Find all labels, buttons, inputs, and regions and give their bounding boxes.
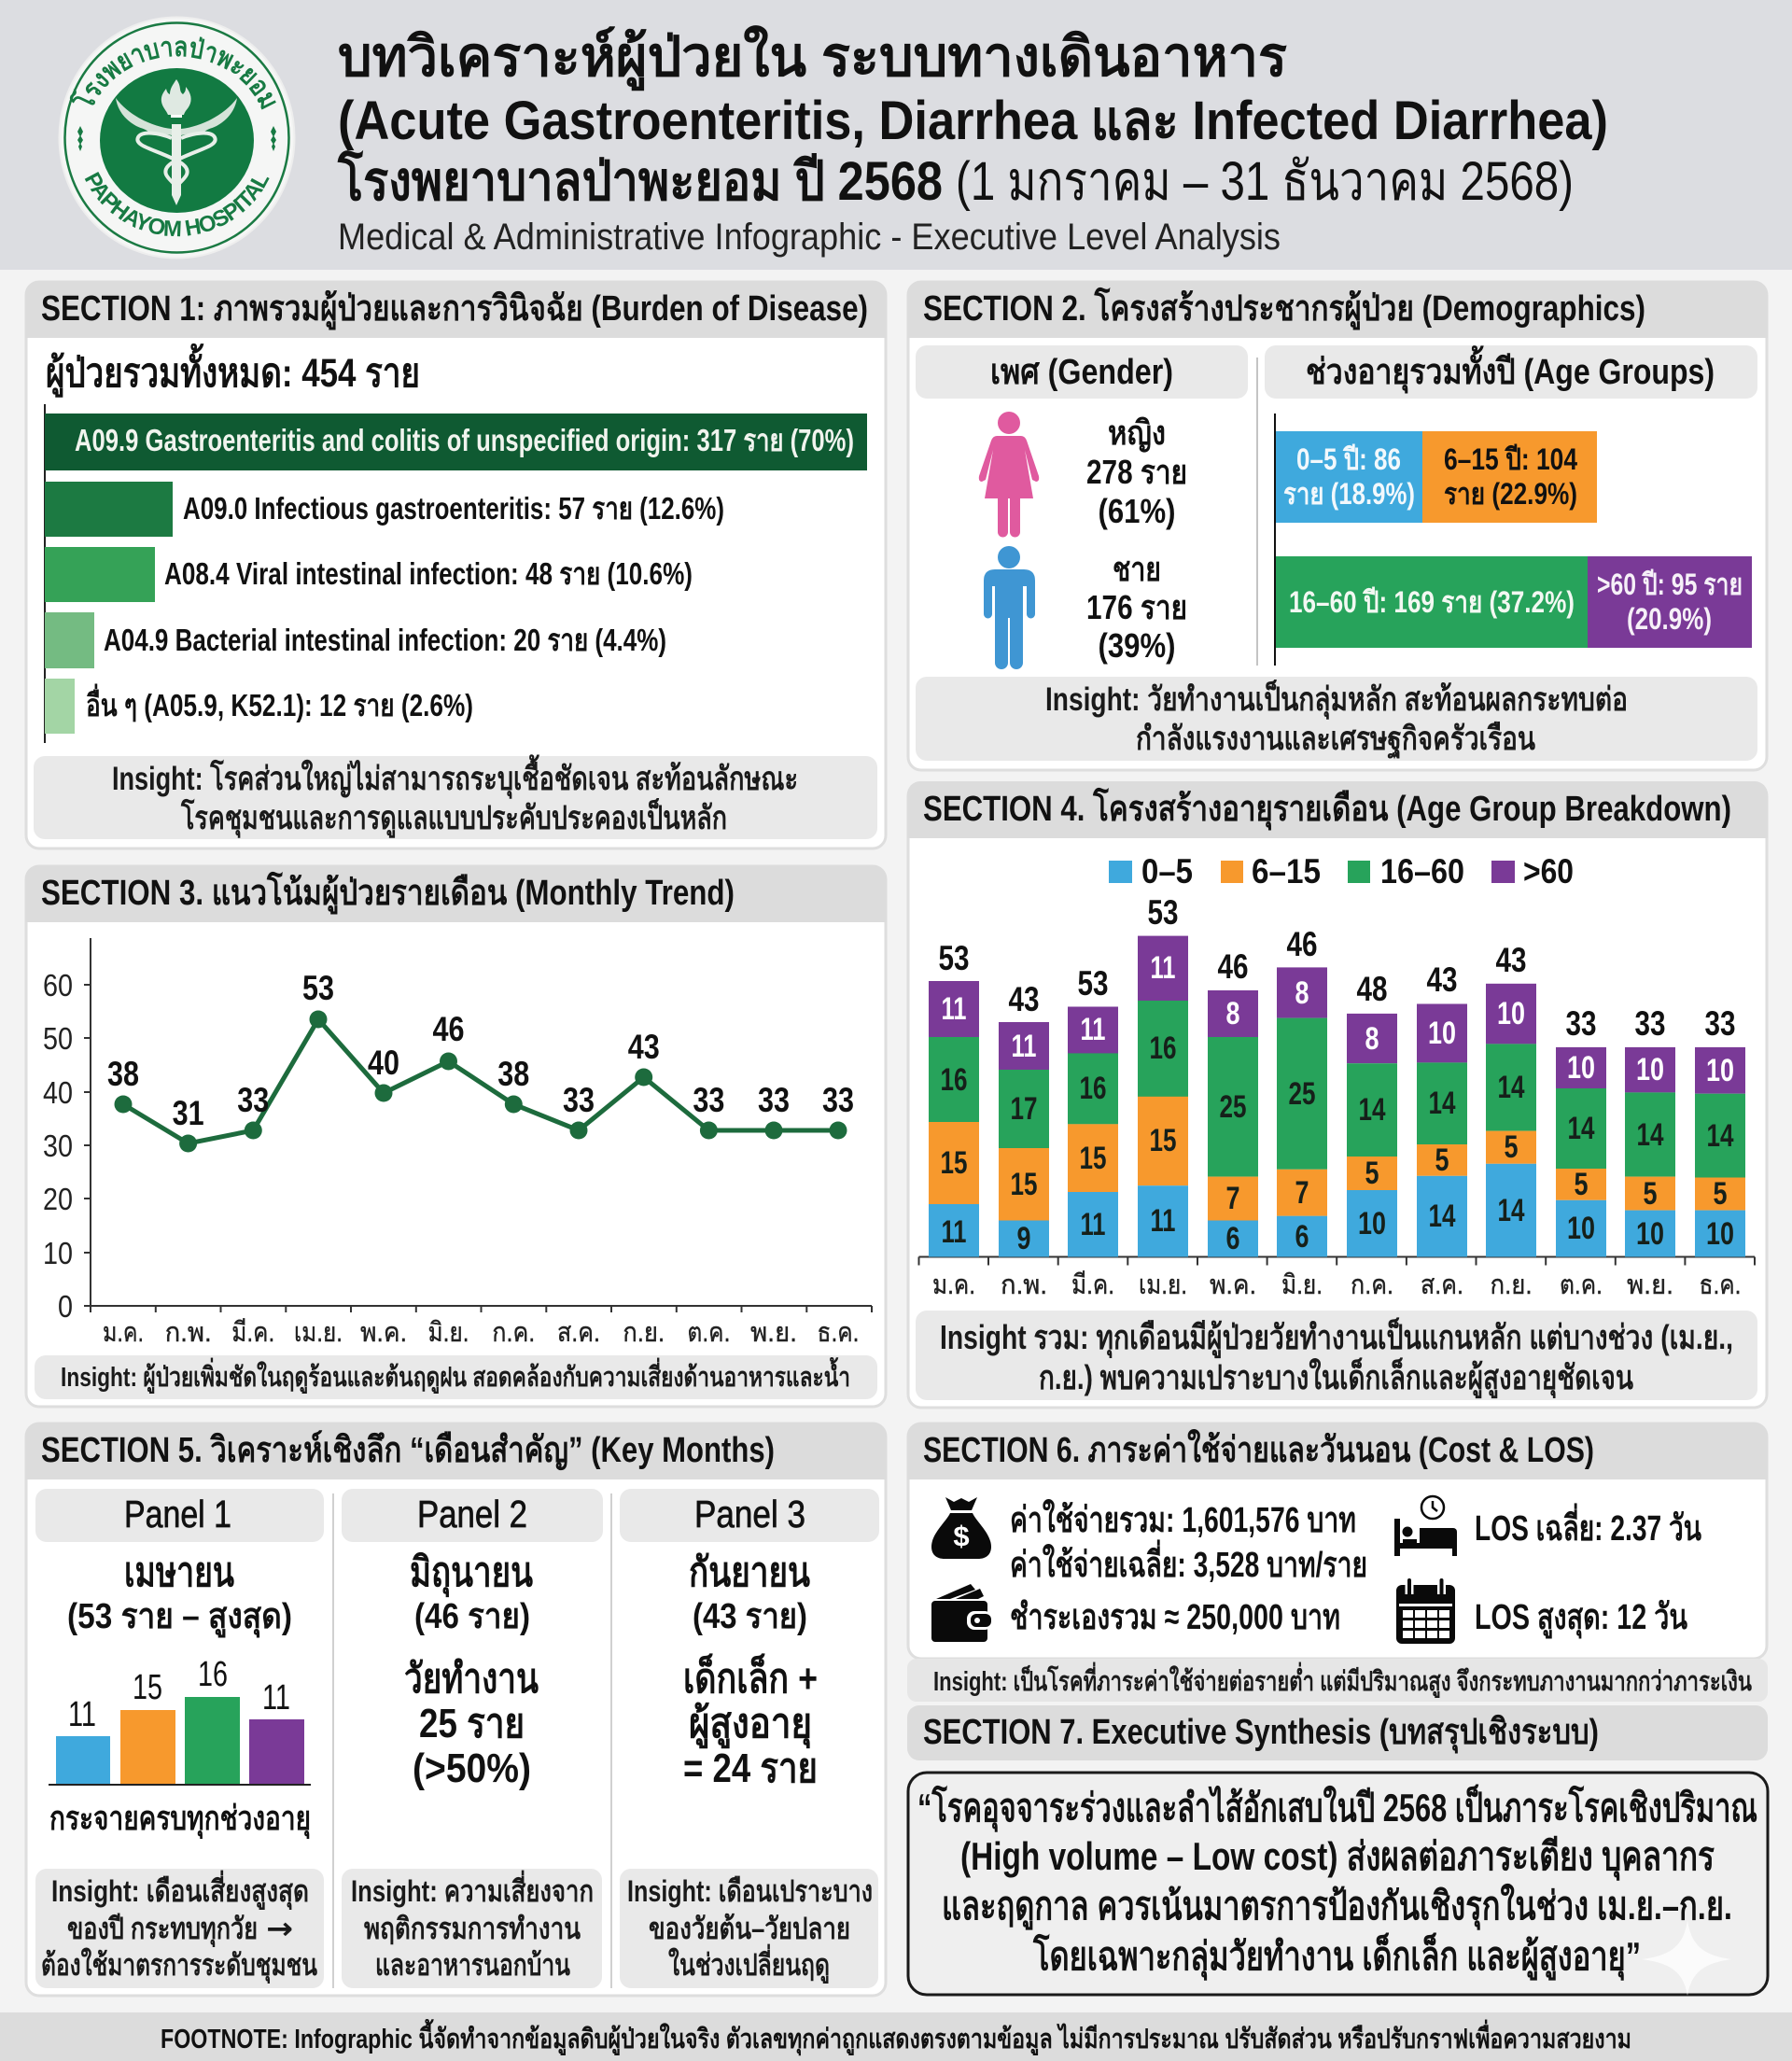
insight panel 2: Insight: ความเสี่ยงจาก <box>351 1870 594 1908</box>
month labels: ก.พ. <box>1001 1270 1047 1300</box>
month labels: ก.ย. <box>1490 1270 1533 1300</box>
bar: Feb: 9 <box>1017 1221 1030 1256</box>
month labels: เม.ย. <box>294 1318 343 1348</box>
mini bar chart: 15 <box>133 1668 162 1707</box>
panel 3: September: Panel 3 <box>694 1493 805 1535</box>
insight panel 3: ของวัยต้น–วัยปลาย <box>649 1912 850 1945</box>
line chart <box>43 938 872 1348</box>
bar: Apr <box>1138 893 1188 1256</box>
insight box section 4 <box>916 1311 1757 1400</box>
insight box section 2: กำลังแรงงานและเศรษฐกิจครัวเรือน <box>1136 721 1535 760</box>
bar: Mar: 11 <box>1081 1012 1105 1047</box>
panel: section 7 heading bar: SECTION 7. Executive Synthesis (บทสรุปเชิงระบบ) <box>923 1713 1599 1754</box>
bar: Nov: 5 <box>1643 1176 1658 1212</box>
bar: Dec: 10 <box>1706 1216 1734 1252</box>
bar: Jul: 5 <box>1365 1156 1379 1191</box>
month labels: ม.ค. <box>932 1270 975 1300</box>
bar: May: 25 <box>1219 1089 1247 1125</box>
bar: Aug: 14 <box>1428 1199 1456 1234</box>
age bar 6-15: ราย (22.9%) <box>1444 477 1577 511</box>
trend line <box>123 1019 838 1143</box>
LOS max: LOS สูงสุด: 12 วัน <box>1475 1598 1687 1639</box>
age groups sub-header: ช่วงอายุรวมทั้งปี (Age Groups) <box>1306 345 1715 394</box>
panel: section 5 key months <box>25 1423 887 1996</box>
legend <box>1109 852 1574 890</box>
age bar over 60: >60 ปี: 95 ราย <box>1597 568 1743 601</box>
bar: Jun: 46 <box>1286 925 1318 963</box>
total patients: ผู้ป่วยรวมทั้งหมด: 454 ราย <box>46 343 420 398</box>
logo: Paphayom Hospital emblem <box>58 17 295 259</box>
bar: Jul: 14 <box>1359 1092 1386 1128</box>
bar: Oct: 5 <box>1574 1167 1589 1202</box>
bar: Aug: 10 <box>1428 1016 1456 1051</box>
bar: Mar: 11 <box>1081 1207 1105 1242</box>
bar: Aug: 14 <box>1428 1086 1456 1121</box>
bar: Sep: 10 <box>1497 996 1525 1031</box>
bar: Jan: 16 <box>941 1062 967 1098</box>
icon: female figure <box>979 412 1039 538</box>
insight box section 1: Insight: โรคส่วนใหญ่ไม่สามารถระบุเชื้อชัดเจน สะท้อนลักษณะ <box>112 754 798 799</box>
bar: Jan: 15 <box>941 1145 967 1181</box>
month labels: ต.ค. <box>1560 1270 1603 1300</box>
bar: Feb <box>999 980 1049 1256</box>
month labels: มี.ค. <box>1071 1270 1114 1300</box>
arrow: → <box>266 1911 293 1946</box>
bar: Dec: 5 <box>1714 1176 1727 1212</box>
bar: Jul: 8 <box>1365 1021 1379 1057</box>
icon: money bag <box>931 1497 991 1559</box>
bar: May: 7 <box>1226 1181 1239 1216</box>
mini bar chart: 16 <box>198 1655 228 1694</box>
insight box section 1 <box>34 754 877 839</box>
insight panel 2 <box>342 1869 602 1988</box>
bar: Sep: 5 <box>1505 1129 1518 1165</box>
month labels: เม.ย. <box>1139 1270 1187 1300</box>
data points <box>114 1010 847 1152</box>
age bar 16-60 <box>1276 556 1588 648</box>
icon: money bag: $ <box>953 1520 970 1552</box>
bar: A09.9 <box>45 414 867 470</box>
bar: Feb: 15 <box>1010 1167 1038 1202</box>
header band <box>0 0 1792 270</box>
bar: Oct: 10 <box>1567 1050 1595 1086</box>
panel 2: June <box>342 1489 603 1988</box>
panel 2: June: (>50%) <box>413 1746 531 1791</box>
insight box section 1: โรคชุมชนและการดูแลแบบประคับประคองเป็นหลัก <box>180 797 727 838</box>
y axis labels: 60 <box>43 968 73 1002</box>
panel: section 7 heading bar <box>907 1705 1768 1760</box>
panel 2: June: (46 ราย) <box>414 1597 530 1636</box>
bar: Jun: 8 <box>1295 975 1309 1011</box>
age bar 0-5: ราย (18.9%) <box>1283 477 1415 511</box>
bar: Mar <box>1068 964 1118 1256</box>
icon: wallet <box>931 1584 992 1642</box>
bar: Oct <box>1556 1004 1606 1256</box>
bar: Apr: 53 <box>1148 893 1178 932</box>
bar: Apr: 11 <box>1150 950 1176 986</box>
y axis labels: 30 <box>43 1129 73 1163</box>
bar: Nov: 14 <box>1637 1117 1664 1153</box>
mini bar chart: 11 <box>262 1678 290 1718</box>
month labels: ธ.ค. <box>1699 1270 1742 1300</box>
panel 1: April: กระจายครบทุกช่วงอายุ <box>49 1799 311 1840</box>
panel 2: June: Panel 2 <box>417 1493 527 1535</box>
insight panel 1 <box>35 1869 324 1988</box>
bar: Jan: 11 <box>941 1214 967 1250</box>
value labels: 33 <box>237 1081 269 1119</box>
insight box section 4: ก.ย.) พบความเปราะบางในเด็กเล็กและผู้สูงอายุชัดเจน <box>1039 1356 1633 1399</box>
insight panel 1: Insight: เดือนเสี่ยงสูงสุด <box>51 1870 309 1911</box>
age bar 0-5: 0–5 ปี: 86 <box>1296 442 1401 476</box>
bar: Jun: 7 <box>1295 1175 1309 1211</box>
month labels: ก.ค. <box>492 1318 535 1348</box>
female stats <box>1086 414 1187 530</box>
bar: A04.9: A04.9 Bacterial intestinal infection: 20 ราย (4.4%) <box>104 623 666 657</box>
insight panel 3: ในช่วงเปลี่ยนฤดู <box>668 1943 830 1984</box>
bar: Nov: 10 <box>1636 1052 1664 1087</box>
legend: 0–5 <box>1141 852 1193 890</box>
bar: others <box>45 679 473 734</box>
bar: Feb: 43 <box>1008 980 1040 1018</box>
panel 1: April: Panel 1 <box>124 1493 231 1535</box>
value labels: 33 <box>693 1081 724 1119</box>
panel 3: September: เด็กเล็ก + <box>683 1653 818 1702</box>
cost text <box>1010 1499 1367 1585</box>
title line 3 hospital: โรงพยาบาลป่าพะยอม ปี 2568 <box>337 148 943 212</box>
insight panel 3: Insight: เดือนเปราะบาง <box>627 1874 873 1908</box>
female stats: (61%) <box>1098 492 1176 530</box>
age bar 6-15 <box>1422 431 1597 523</box>
subtitle: Medical & Administrative Infographic - Executive Level Analysis <box>338 217 1281 258</box>
month labels: ม.ค. <box>103 1318 144 1348</box>
bar: Mar: 15 <box>1079 1141 1107 1176</box>
stacked bar chart <box>918 893 1755 1300</box>
panel 3: September: กันยายน <box>689 1549 810 1595</box>
executive synthesis quote box <box>908 1773 1768 1995</box>
age bar 16-60: 16–60 ปี: 169 ราย (37.2%) <box>1289 585 1575 619</box>
bar: Jan: 11 <box>941 991 967 1027</box>
bar: Aug: 43 <box>1426 960 1458 999</box>
month labels: ส.ค. <box>557 1318 600 1348</box>
month labels: ส.ค. <box>1421 1270 1463 1300</box>
value labels: 31 <box>173 1094 204 1132</box>
value labels: 53 <box>302 969 334 1007</box>
footnote band <box>0 2012 1792 2061</box>
bar: May <box>1208 947 1258 1256</box>
bar: Oct: 33 <box>1566 1004 1596 1043</box>
bar: Sep: 43 <box>1495 941 1527 979</box>
bar: Sep <box>1486 941 1536 1256</box>
y axis labels: 50 <box>43 1021 73 1056</box>
bar: Oct: 10 <box>1567 1211 1595 1246</box>
insight box section 3 <box>35 1355 877 1399</box>
value labels: 46 <box>433 1010 465 1048</box>
bar: Feb: 17 <box>1010 1091 1038 1127</box>
cost text: ค่าใช้จ่ายเฉลี่ย: 3,528 บาท/ราย <box>1010 1539 1367 1585</box>
bar: Apr: 15 <box>1150 1123 1176 1158</box>
bar: Mar: 16 <box>1079 1071 1107 1106</box>
month labels: พ.ค. <box>1210 1270 1256 1300</box>
bar: Sep: 14 <box>1497 1193 1525 1228</box>
title line 1: บทวิเคราะห์ผู้ป่วยใน ระบบทางเดินอาหาร <box>338 24 1287 91</box>
bar: A08.4: A08.4 Viral intestinal infection: 48 ราย (10.6%) <box>164 556 693 591</box>
panel 1: April <box>35 1489 324 1988</box>
value labels: 40 <box>368 1044 399 1082</box>
legend: 6–15 <box>1252 852 1321 890</box>
icon: calendar <box>1396 1580 1455 1644</box>
bar: Jul: 48 <box>1357 970 1387 1008</box>
bar: Jun: 6 <box>1295 1219 1309 1255</box>
y axis labels <box>43 968 73 1324</box>
month labels: พ.ย. <box>1627 1270 1673 1300</box>
insight panel 1: ต้องใช้มาตรการระดับชุมชน <box>41 1947 317 1984</box>
insight panel 2: พฤติกรรมการทำงาน <box>364 1912 581 1945</box>
bar: Dec: 10 <box>1706 1053 1734 1088</box>
bar: Apr: 16 <box>1150 1030 1176 1066</box>
mini bar chart <box>49 1655 311 1786</box>
insight box section 2 <box>916 677 1757 761</box>
insight box section 3: Insight: ผู้ป่วยเพิ่มชัดในฤดูร้อนและต้นฤดูฝน สอดคล้องกับความเสี่ยงด้านอาหารและน้ำ <box>61 1356 850 1394</box>
panel 1: April: เมษายน <box>124 1549 234 1595</box>
bar: Dec: 33 <box>1704 1004 1736 1043</box>
bar: Dec: 14 <box>1706 1118 1734 1154</box>
bar: Sep: 14 <box>1497 1070 1525 1105</box>
title line 3 dates: (1 มกราคม – 31 ธันวาคม 2568) <box>956 151 1574 212</box>
panel 3: September <box>620 1489 879 1988</box>
panel 1: April: (53 ราย – สูงสุด) <box>67 1597 292 1638</box>
panel 3: September: ผู้สูงอายุ <box>689 1701 812 1749</box>
gender sub-header: เพศ (Gender) <box>990 353 1173 392</box>
bar: Apr: 11 <box>1150 1203 1176 1239</box>
month labels: ก.ย. <box>623 1318 665 1348</box>
bar: Jan <box>929 939 979 1256</box>
panel: section 6 cost and LOS <box>907 1423 1768 1702</box>
month labels: มิ.ย. <box>1281 1270 1323 1300</box>
bar: A08.4 <box>45 547 693 602</box>
insight box section 2: Insight: วัยทำงานเป็นกลุ่มหลัก สะท้อนผลกระทบต่อ <box>1045 679 1628 720</box>
y axis labels: 20 <box>43 1182 73 1216</box>
bar: Jan: 53 <box>939 939 969 977</box>
panel 2: June: วัยทำงาน <box>404 1656 539 1702</box>
y axis labels: 0 <box>58 1289 73 1324</box>
female stats: หญิง <box>1108 414 1166 453</box>
female stats: 278 ราย <box>1086 453 1187 491</box>
age bar 6-15: 6–15 ปี: 104 <box>1444 442 1577 476</box>
age bar over 60 <box>1588 556 1752 648</box>
icon: bed with clock <box>1394 1496 1457 1556</box>
cost text: ค่าใช้จ่ายรวม: 1,601,576 บาท <box>1010 1499 1356 1540</box>
bar: Jun: 25 <box>1288 1076 1316 1112</box>
bar: Nov <box>1625 1004 1675 1256</box>
legend: 16–60 <box>1380 852 1464 890</box>
bar: A09.9: A09.9 Gastroenteritis and colitis of unspecified origin: 317 ราย (70%) <box>75 423 854 457</box>
section 2 heading: SECTION 2. โครงสร้างประชากรผู้ป่วย (Demographics) <box>923 287 1645 330</box>
panel 2: June: มิถุนายน <box>410 1549 533 1598</box>
month labels: พ.ย. <box>750 1318 797 1348</box>
panel 2: June: 25 ราย <box>419 1701 525 1746</box>
bar: others: อื่น ๆ (A05.9, K52.1): 12 ราย (2.6%) <box>86 683 473 722</box>
month labels: ก.พ. <box>165 1318 212 1348</box>
section 3 heading: SECTION 3. แนวโน้มผู้ป่วยรายเดือน (Monthly Trend) <box>41 871 735 915</box>
section 5 heading: SECTION 5. วิเคราะห์เชิงลึก “เดือนสำคัญ” (Key Months) <box>41 1430 775 1470</box>
value labels: 33 <box>758 1081 790 1119</box>
panel 3: September: (43 ราย) <box>693 1597 807 1636</box>
insight panel 2: และอาหารนอกบ้าน <box>375 1948 570 1982</box>
LOS average: LOS เฉลี่ย: 2.37 วัน <box>1475 1503 1701 1549</box>
insight strip section 6 <box>907 1659 1768 1702</box>
value labels: 33 <box>563 1081 595 1119</box>
bar: Mar: 53 <box>1077 964 1109 1002</box>
bar: May: 46 <box>1217 947 1249 986</box>
male stats: 176 ราย <box>1086 588 1187 626</box>
bar: Jul: 10 <box>1358 1206 1386 1241</box>
section 1 heading: SECTION 1: ภาพรวมผู้ป่วยและการวินิจฉัย (Burden of Disease) <box>41 289 868 330</box>
watermark sparkle <box>1642 1920 1731 1996</box>
insight panel 3 <box>620 1869 878 1988</box>
bar: Aug: 5 <box>1435 1143 1449 1178</box>
male stats: (39%) <box>1098 626 1176 665</box>
bar: Jun <box>1277 925 1327 1256</box>
panel: section 3 monthly trend <box>25 865 887 1407</box>
bar: Feb: 11 <box>1012 1029 1036 1064</box>
value labels: 38 <box>107 1055 139 1093</box>
male stats: ชาย <box>1113 550 1161 588</box>
bar: May: 8 <box>1226 996 1239 1031</box>
bar: Aug <box>1417 960 1467 1256</box>
month labels: ก.ค. <box>1351 1270 1393 1300</box>
panel: section 1 burden of disease <box>25 281 887 848</box>
bar: Jul <box>1347 970 1397 1256</box>
month labels: พ.ค. <box>360 1318 407 1348</box>
logo: Paphayom Hospital emblem: PAPHAYOM HOSPITAL <box>84 172 270 237</box>
panel: section 2 demographics <box>907 281 1768 770</box>
value labels <box>107 969 854 1132</box>
month labels: มิ.ย. <box>427 1318 469 1348</box>
month labels: ธ.ค. <box>818 1318 859 1348</box>
age groups sub-header <box>1265 345 1757 399</box>
title line 2: (Acute Gastroenteritis, Diarrhea และ Infected Diarrhea) <box>338 91 1608 151</box>
bar: A04.9 <box>45 612 666 668</box>
gender sub-header <box>916 345 1248 399</box>
value labels: 43 <box>628 1028 660 1066</box>
logo: Paphayom Hospital emblem: โรงพยาบาลป่าพะยอม <box>69 36 276 110</box>
month labels: ต.ค. <box>687 1318 730 1348</box>
panel: section 4 age group breakdown <box>907 781 1768 1408</box>
age bar 0-5 <box>1276 431 1422 523</box>
legend: >60 <box>1523 852 1574 890</box>
icon: male figure <box>984 546 1035 669</box>
panel 3: September: = 24 ราย <box>683 1746 818 1791</box>
insight panel 1: ของปี กระทบทุกวัย <box>67 1912 258 1948</box>
y axis labels: 10 <box>43 1236 73 1270</box>
bar: May: 6 <box>1226 1221 1239 1256</box>
mini bar chart: 11 <box>68 1695 96 1734</box>
age bar over 60: (20.9%) <box>1627 602 1712 636</box>
bar: A09.0: A09.0 Infectious gastroenteritis: 57 ราย (12.6%) <box>183 491 724 526</box>
bar: Oct: 14 <box>1568 1111 1595 1146</box>
value labels: 38 <box>497 1055 529 1093</box>
bar: Nov: 33 <box>1635 1004 1665 1043</box>
bar: Nov: 10 <box>1636 1216 1664 1252</box>
y axis labels: 40 <box>43 1075 73 1110</box>
male stats <box>1086 550 1187 665</box>
bar: A09.0 <box>45 482 724 537</box>
bar: Dec <box>1695 1004 1745 1256</box>
month labels <box>103 1318 859 1348</box>
value labels: 33 <box>822 1081 854 1119</box>
self-pay text: ชำระเองรวม ≈ 250,000 บาท <box>1010 1598 1340 1637</box>
month labels: มี.ค. <box>231 1318 274 1348</box>
month labels <box>932 1270 1742 1300</box>
section 6 heading: SECTION 6. ภาระค่าใช้จ่ายและวันนอน (Cost & LOS) <box>923 1429 1594 1470</box>
